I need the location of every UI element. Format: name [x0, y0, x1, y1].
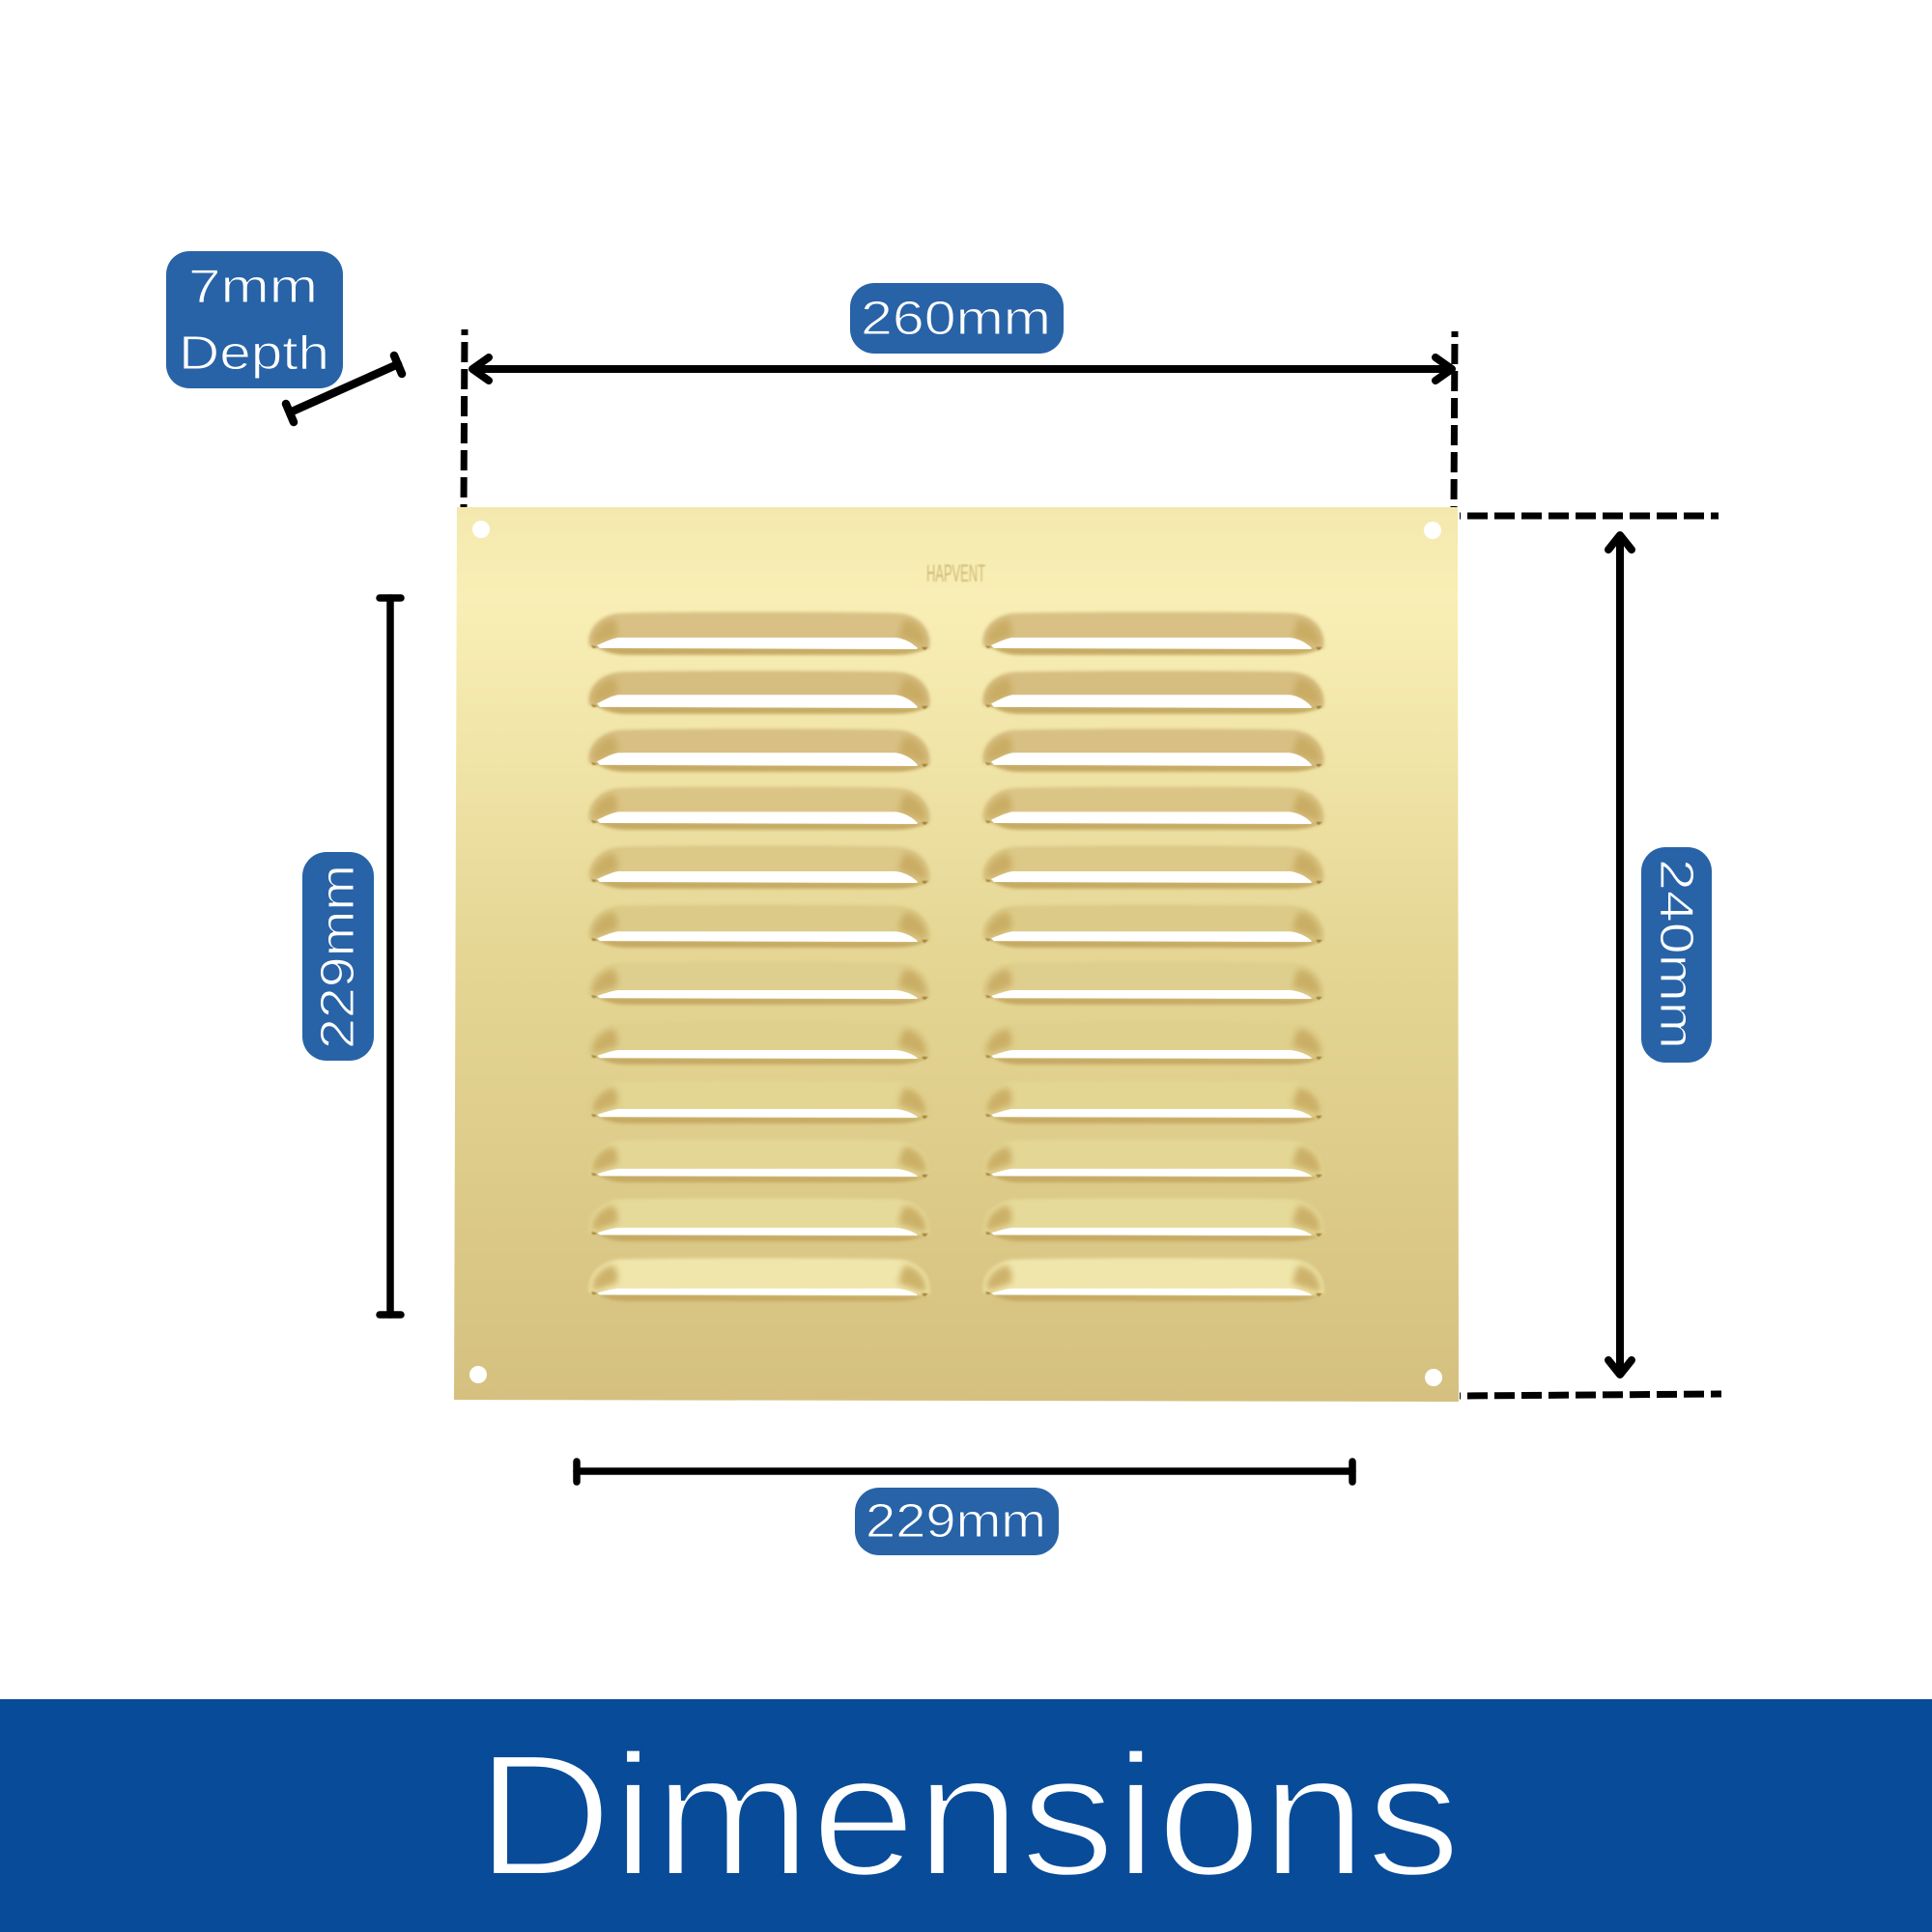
- logo stamp: HAPVENT: [926, 560, 985, 587]
- bar: 229mm inner width: [577, 1462, 1352, 1482]
- label: 7mm depth: 7mm: [188, 261, 318, 313]
- louvre row 5: [589, 846, 1323, 889]
- louvre row 6: [589, 904, 1323, 948]
- dashed guide: top of height: [1460, 512, 1719, 520]
- dashed guide: right of width: [1454, 331, 1455, 507]
- label: 260mm: 260mm: [861, 293, 1051, 345]
- dashed guide: left of width: [464, 329, 465, 507]
- screw holes: [469, 521, 1442, 1386]
- label: 229mm vertical: 229mm: [312, 865, 364, 1049]
- label: 240mm vertical: 240mm: [1650, 859, 1702, 1049]
- bar: 229mm inner height: [380, 598, 401, 1315]
- bar: 7mm depth: [286, 355, 402, 422]
- arrow: 240mm height: [1608, 535, 1632, 1375]
- louvre row 12: [589, 1258, 1323, 1301]
- label: 229mm horizontal: [855, 1488, 1059, 1555]
- louvre row 4: [589, 786, 1323, 830]
- dashed guide: bottom of height: [1460, 1394, 1721, 1396]
- label: 7mm depth: Depth: [179, 327, 329, 380]
- title: Dimensions: [476, 1719, 1461, 1913]
- label: 7mm depth: [166, 251, 343, 388]
- arrow: 260mm width: [472, 357, 1452, 381]
- vent plate: [454, 507, 1459, 1402]
- louvre row 9: [589, 1080, 1323, 1123]
- label: 229mm vertical: [302, 852, 374, 1061]
- louvre row 11: [589, 1198, 1323, 1241]
- louvre row 3: [589, 728, 1323, 772]
- label: 260mm: [850, 283, 1064, 354]
- louvre row 10: [589, 1140, 1323, 1182]
- product: brass louvre vent plate: [454, 507, 1459, 1402]
- label: 240mm vertical: [1641, 847, 1712, 1063]
- louvre row 7: [589, 962, 1323, 1005]
- louvre row 8: [589, 1022, 1323, 1065]
- louvre row 1: [589, 612, 1323, 655]
- louvre row 2: [589, 670, 1323, 714]
- footer banner: [0, 1699, 1932, 1932]
- label: 229mm horizontal: 229mm: [866, 1495, 1046, 1548]
